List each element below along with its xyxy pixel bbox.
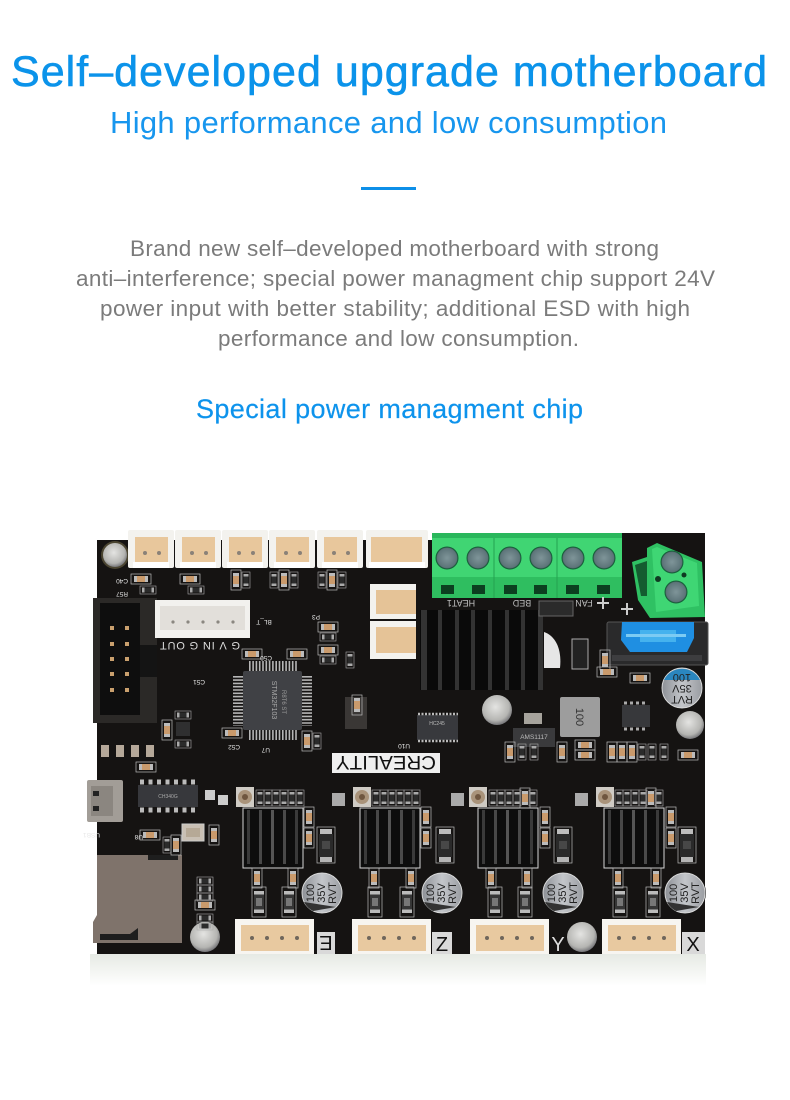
divider xyxy=(361,187,416,190)
BLT connector: G V IN G OUT xyxy=(160,639,240,651)
USB chip CH340: CH340G xyxy=(158,794,178,800)
fuse holder and blue fuse xyxy=(607,622,708,665)
circuit board xyxy=(97,533,705,954)
terminal labels xyxy=(447,598,593,608)
top JST connectors xyxy=(128,530,428,568)
silkscreen labels: USB1 xyxy=(83,831,100,838)
silkscreen labels: U8 xyxy=(134,833,143,840)
subtitle: High performance and low consumption xyxy=(110,105,667,140)
section heading: Special power managment chip xyxy=(196,394,583,424)
motherboard photo illustration xyxy=(83,530,708,986)
body paragraph: Brand new self–developed motherboard with strong xyxy=(130,236,659,261)
CREALITY label: CREALITY xyxy=(336,751,436,772)
bottom capacitors: 35V xyxy=(557,883,569,903)
bottom capacitors: 100 xyxy=(425,884,437,902)
driver diodes xyxy=(317,827,696,863)
USB port xyxy=(87,780,123,822)
misc surface mount parts xyxy=(101,570,698,930)
terminal labels: BED xyxy=(512,598,531,608)
stepper heatsinks xyxy=(243,808,664,868)
MCU chip: STM32F103 xyxy=(270,681,277,719)
resistor rows xyxy=(256,788,663,808)
top right capacitor: 35V xyxy=(672,682,692,694)
large resistors xyxy=(252,887,660,917)
axis labels xyxy=(317,793,705,956)
bottom capacitors: 35V xyxy=(436,883,448,903)
bottom capacitors: 35V xyxy=(679,883,691,903)
large heatsink xyxy=(420,610,560,690)
MCU chip xyxy=(238,666,307,735)
axis labels: X xyxy=(686,934,700,956)
BLT connector: BL_T xyxy=(256,618,272,625)
bottom capacitors: 100 xyxy=(305,884,317,902)
top right capacitor xyxy=(661,667,703,709)
bottom stepper connectors xyxy=(235,919,681,954)
silkscreen labels xyxy=(83,577,410,840)
silkscreen labels: C52 xyxy=(228,743,240,750)
BLT connector xyxy=(155,600,272,651)
axis labels: Z xyxy=(436,934,448,956)
mounting holes xyxy=(101,541,704,952)
power ICs and inductor: AMS1117 xyxy=(520,734,548,741)
SD card slot xyxy=(93,855,182,943)
title: Self–developed upgrade motherboard xyxy=(11,48,767,96)
power ICs and inductor: 100 xyxy=(573,708,585,726)
silkscreen labels: R57 xyxy=(116,590,128,597)
body paragraph: power input with better stability; additional ESD with high xyxy=(100,296,690,321)
terminal labels: HEAT1 xyxy=(447,598,475,608)
bottom capacitors: RVT xyxy=(690,882,702,904)
top right capacitor: 100 xyxy=(673,671,691,683)
USB chip CH340 xyxy=(138,782,198,810)
silkscreen labels: U10 xyxy=(398,742,410,749)
bottom capacitors: RVT xyxy=(568,882,580,904)
silkscreen labels: C40 xyxy=(116,577,128,584)
bottom capacitors: RVT xyxy=(447,882,459,904)
silkscreen plus signs xyxy=(597,597,633,615)
silkscreen labels: P3 xyxy=(312,613,320,620)
small capacitors beside drivers xyxy=(252,807,676,888)
body paragraph: performance and low consumption. xyxy=(218,326,579,351)
silkscreen labels: U7 xyxy=(261,746,270,753)
box header xyxy=(93,598,157,723)
body paragraph: anti–interference; special power managment chip support 24V xyxy=(76,266,715,291)
terminal labels: FAN xyxy=(575,598,593,608)
side fan connectors xyxy=(370,584,416,659)
green screw terminal block xyxy=(432,533,622,598)
top right capacitor: RVT xyxy=(671,693,693,705)
silkscreen labels: C50 xyxy=(260,654,272,661)
board reflection xyxy=(90,954,706,986)
axis labels: Y xyxy=(551,934,565,956)
bottom capacitors xyxy=(301,872,706,914)
bottom capacitors: 100 xyxy=(668,884,680,902)
body paragraph xyxy=(76,236,715,351)
bottom capacitors: 100 xyxy=(546,884,558,902)
potentiometers xyxy=(236,787,614,807)
axis labels: E xyxy=(319,931,333,953)
power ICs and inductor: HC245 xyxy=(429,721,445,727)
power ICs and inductor xyxy=(417,601,650,747)
power input terminal xyxy=(632,543,705,618)
bottom capacitors: RVT xyxy=(327,882,339,904)
MCU chip: R8T6 ST xyxy=(280,690,286,714)
silkscreen labels: C51 xyxy=(193,678,205,685)
bottom capacitors: 35V xyxy=(316,883,328,903)
crystal xyxy=(182,824,204,841)
